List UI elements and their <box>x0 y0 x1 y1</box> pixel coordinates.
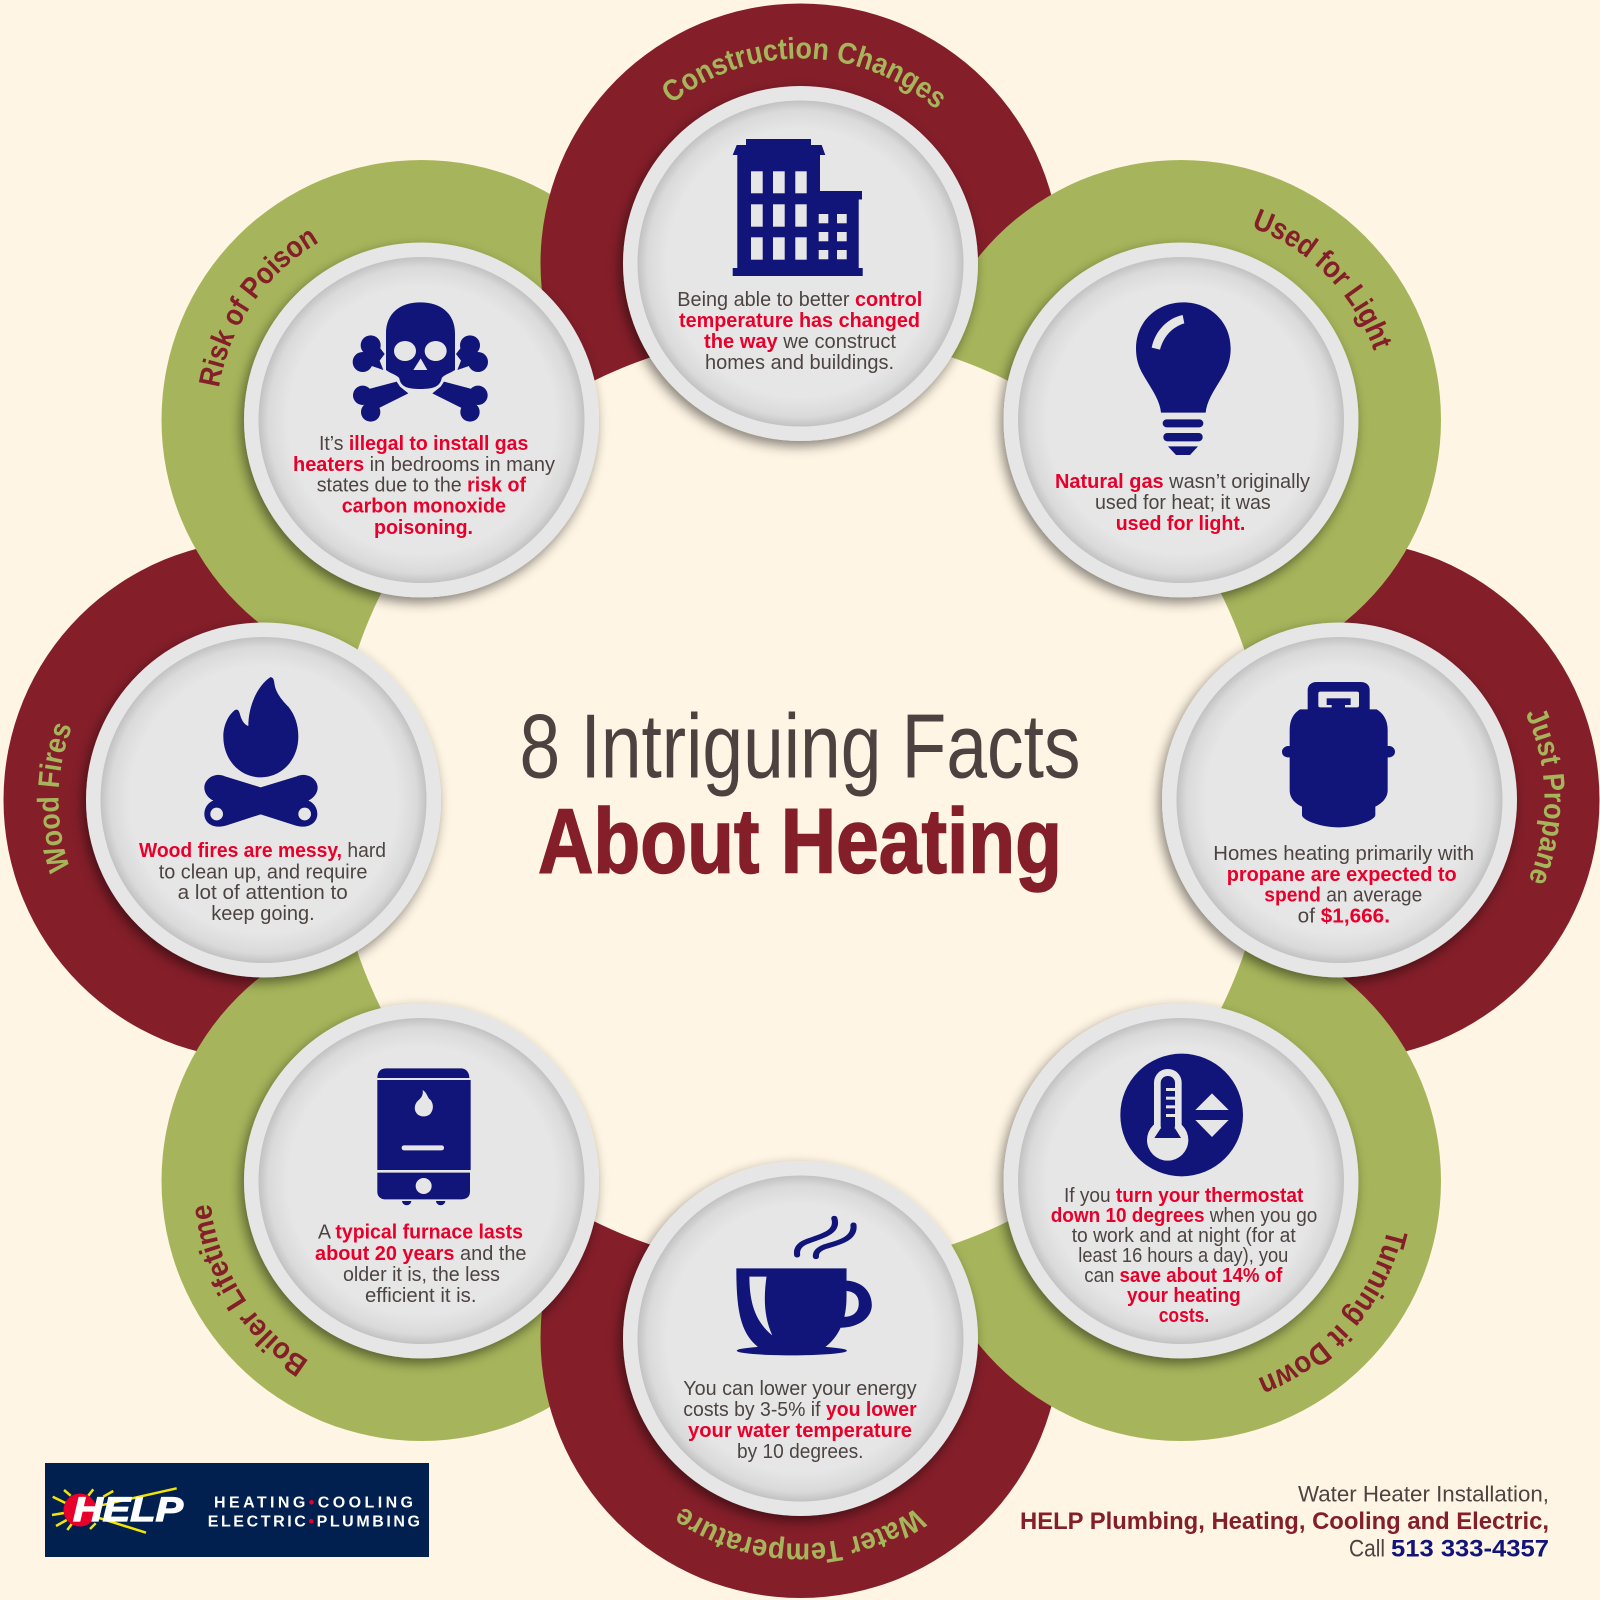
text: poison fact: poisoning. <box>374 517 473 539</box>
text: wood fires fact: Wood fires are messy, hard <box>139 840 386 862</box>
icon: sun rays <box>52 1488 177 1533</box>
panel: wood fires <box>36 620 446 990</box>
label: Used for Light: Used for Light <box>1254 208 1392 351</box>
panel: water temperature <box>614 1158 982 1563</box>
text: light fact: used for light. <box>1116 513 1245 535</box>
text: construction fact: the way we construct <box>704 331 896 353</box>
panel: boiler lifetime <box>196 1000 604 1377</box>
panel: turning it down <box>992 1000 1408 1392</box>
text: poison fact <box>293 433 555 539</box>
icon: coffee cup <box>736 1218 872 1355</box>
label: Boiler Lifetime: Boiler Lifetime <box>196 1205 308 1377</box>
text: poison fact: heaters in bedrooms in many <box>293 454 555 476</box>
text: furnace fact: about 20 years and the <box>315 1243 526 1265</box>
text: light fact <box>1055 471 1310 535</box>
logo: HELP <box>45 1463 429 1557</box>
text: wood fires fact: keep going. <box>211 903 315 925</box>
text: propane fact: Homes heating primarily with <box>1213 843 1474 865</box>
label: Risk of Poison: Risk of Poison <box>198 231 318 386</box>
title <box>520 697 1080 893</box>
text: construction fact: Being able to better control <box>677 289 922 311</box>
label: Wood Fires: Wood Fires <box>36 724 70 874</box>
contact text: 513 333-4357 <box>1391 1536 1549 1563</box>
label: Construction Changes: Construction Changes <box>663 36 944 108</box>
contact text: HELP Plumbing, Heating, Cooling and Electric, <box>1020 1508 1549 1535</box>
panel: just propane <box>1150 620 1564 990</box>
icon: skull and crossbones <box>353 302 488 422</box>
text: thermostat fact: costs. <box>1159 1305 1209 1327</box>
icon: furnace <box>377 1068 471 1205</box>
text: construction fact: temperature has changed <box>679 310 920 332</box>
text: water temperature fact: costs by 3-5% if you lower <box>683 1399 917 1421</box>
text: wood fires fact: a lot of attention to <box>178 882 348 904</box>
title: About Heating <box>538 791 1062 893</box>
icon: propane tank <box>1282 682 1395 827</box>
title: 8 Intriguing Facts <box>520 697 1080 798</box>
text: thermostat fact: your heating <box>1127 1285 1241 1307</box>
text: poison fact: states due to the risk of <box>317 475 526 497</box>
logo wordmark: HELP <box>73 1491 183 1529</box>
text: water temperature fact: by 10 degrees. <box>737 1441 864 1463</box>
icon: thermometer with arrows <box>1120 1054 1243 1176</box>
label: Just Propane: Just Propane <box>1527 710 1564 884</box>
icon: red sun <box>64 1494 96 1526</box>
text: furnace fact: older it is, the less <box>343 1264 500 1286</box>
icon: campfire <box>204 677 318 827</box>
text: construction fact <box>677 289 922 374</box>
contact text: Water Heater Installation, <box>1298 1482 1549 1507</box>
icon: light bulb <box>1136 302 1231 455</box>
text: propane fact <box>1213 843 1474 928</box>
panel: used for light <box>992 208 1392 611</box>
text: poison fact: carbon monoxide <box>342 496 506 518</box>
text: wood fires fact: to clean up, and require <box>159 862 367 884</box>
label: Water Temperature: Water Temperature <box>677 1508 928 1563</box>
text: wood fires fact <box>139 840 386 925</box>
text: water temperature fact: You can lower your energy <box>683 1378 917 1400</box>
icon: building <box>733 139 863 276</box>
text: light fact: used for heat; it was <box>1095 492 1271 514</box>
label: Turning it Down: Turning it Down <box>1258 1233 1408 1392</box>
text: thermostat fact: If you turn your thermostat <box>1064 1185 1304 1207</box>
text: propane fact: spend an average <box>1264 885 1422 907</box>
text: furnace fact <box>315 1222 526 1307</box>
contact text: Call <box>1349 1536 1385 1563</box>
text: water temperature fact <box>683 1378 917 1463</box>
contact text <box>1020 1482 1549 1563</box>
text: thermostat fact <box>1051 1185 1317 1327</box>
text: light fact: Natural gas wasn’t originally <box>1055 471 1310 493</box>
logo services line two: ELECTRIC•PLUMBING <box>208 1514 420 1531</box>
text: water temperature fact: your water temperature <box>688 1420 912 1442</box>
panel: construction changes <box>614 36 982 454</box>
text: furnace fact: A typical furnace lasts <box>318 1222 523 1244</box>
text: thermostat fact: down 10 degrees when you go <box>1051 1205 1317 1227</box>
logo services line one: HEATING•COOLING <box>214 1495 413 1512</box>
text: propane fact: propane are expected to <box>1227 864 1457 886</box>
text: thermostat fact: least 16 hours a day), you <box>1078 1245 1288 1267</box>
text: thermostat fact: can save about 14% of <box>1084 1265 1283 1287</box>
panel: risk of poison <box>198 231 604 611</box>
text: poison fact: It’s illegal to install gas <box>319 433 528 455</box>
text: thermostat fact: to work and at night (for at <box>1072 1225 1296 1247</box>
text: construction fact: homes and buildings. <box>705 352 894 374</box>
text: furnace fact: efficient it is. <box>365 1285 476 1307</box>
text: propane fact: of $1,666. <box>1298 906 1390 928</box>
